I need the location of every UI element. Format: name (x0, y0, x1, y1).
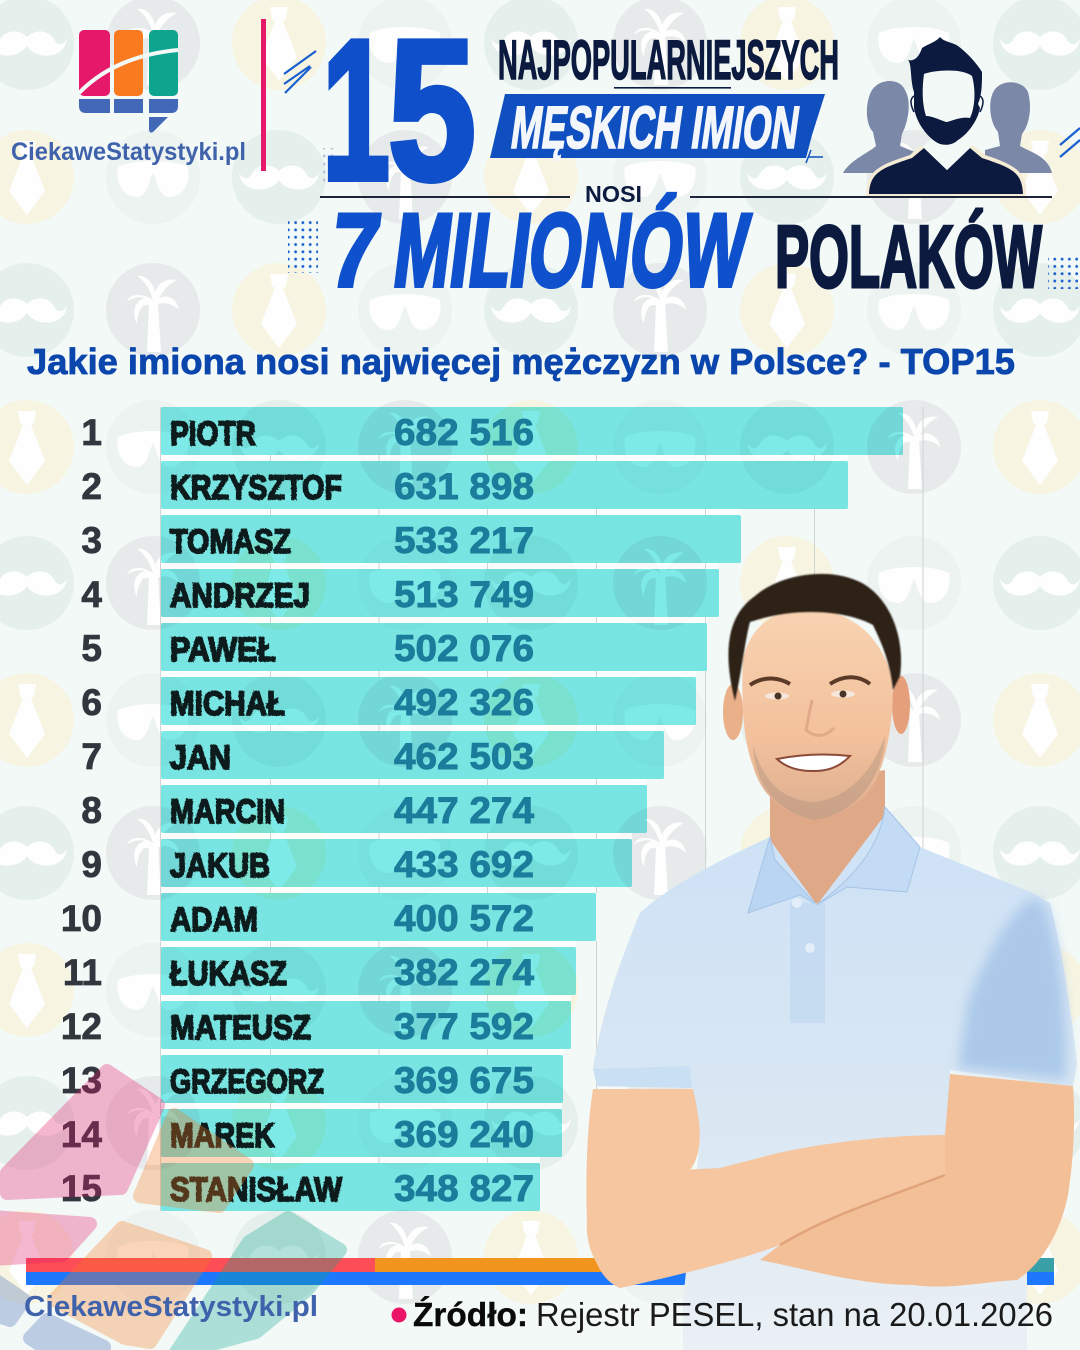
row 11: Łukasz (63, 947, 576, 995)
row 3: Tomasz: 533 217 (394, 520, 534, 561)
row 2: Krzysztof: 631 898 (394, 466, 534, 507)
row 8: Marcin (81, 785, 647, 833)
shirt (593, 807, 1077, 1350)
row 1: Piotr: 682 516 (394, 412, 534, 453)
watermark logo (0, 1071, 340, 1350)
row 4: Andrzej: 4 (81, 574, 102, 615)
row 15: Stanisław: STANISŁAW (170, 1171, 343, 1209)
nose (806, 700, 834, 736)
ears (723, 676, 910, 740)
right sleeve shading (958, 897, 1066, 1080)
row 12: Mateusz: MATEUSZ (170, 1009, 311, 1047)
eyebrows (750, 677, 870, 685)
row 13: Grzegorz: 13 (61, 1060, 102, 1101)
photo: smiling man in blue polo (586, 574, 1077, 1350)
row 3: Tomasz: TOMASZ (170, 523, 291, 561)
headline number 15: 1 (322, 0, 390, 222)
row 12: Mateusz (61, 1001, 571, 1049)
row 9: Jakub: JAKUB (170, 847, 270, 885)
row 3: Tomasz (81, 515, 741, 563)
row 12: Mateusz: 377 592 (394, 1006, 534, 1047)
face (742, 608, 893, 820)
headline banner: męskich imion (490, 93, 825, 163)
chart heading: Jakie imiona nosi najwięcej mężczyzn w Polsce? - TOP15 (27, 341, 1015, 382)
left collar (748, 837, 817, 913)
left sleeve hem (593, 1066, 692, 1088)
row 9: Jakub (81, 839, 632, 887)
row 1: Piotr: PIOTR (170, 415, 256, 453)
row 13: Grzegorz: 369 675 (394, 1060, 534, 1101)
row 11: Łukasz: ŁUKASZ (170, 955, 287, 993)
upper arm and lower forearm right (760, 1074, 1074, 1287)
row 5: Paweł (81, 623, 707, 671)
upper arm left (586, 1089, 700, 1288)
row 10: Adam: 400 572 (394, 898, 534, 939)
row 5: Paweł: PAWEŁ (170, 631, 276, 669)
smile (777, 755, 850, 771)
row 7: Jan: 7 (81, 736, 102, 777)
row 6: Michał (81, 677, 696, 725)
source note: Rejestr PESEL, stan na 20.01.2026 (536, 1296, 1053, 1333)
neck (770, 770, 885, 905)
row 1: Piotr (81, 407, 903, 455)
row 7: Jan: JAN (170, 739, 231, 777)
row 2: Krzysztof (81, 461, 848, 509)
row 1: Piotr: 1 (81, 412, 102, 453)
row 9: Jakub: 433 692 (394, 844, 534, 885)
row 6: Michał: 492 326 (394, 682, 534, 723)
pink vertical divider (261, 19, 266, 171)
headline: 7 milionów: MILIONÓW (388, 192, 755, 309)
row 14: Marek: 14 (61, 1114, 102, 1155)
row 12: Mateusz: 12 (61, 1006, 102, 1047)
row 8: Marcin: MARCIN (170, 793, 285, 831)
row 4: Andrzej: 513 749 (394, 574, 534, 615)
row 2: Krzysztof: KRZYSZTOF (170, 469, 342, 507)
logo: CiekaweStatystyki.pl: CiekaweStatystyki.pl (11, 138, 246, 166)
row 13: Grzegorz (61, 1055, 563, 1103)
row 4: Andrzej (81, 569, 719, 617)
row 10: Adam (61, 893, 596, 941)
footer brand: CiekaweStatystyki.pl (24, 1291, 318, 1323)
headline: 7 milionów (324, 192, 755, 309)
row 2: Krzysztof: 2 (81, 466, 102, 507)
row 8: Marcin: 447 274 (394, 790, 534, 831)
stubble (753, 735, 885, 820)
headline banner: męskich imion: MĘSKICH IMION (507, 93, 804, 161)
row 6: Michał: MICHAŁ (170, 685, 285, 723)
headline number 15: 5 (388, 0, 476, 222)
row 14: Marek: MAREK (170, 1117, 275, 1155)
row 15: Stanisław: 348 827 (394, 1168, 534, 1209)
row 7: Jan: 462 503 (394, 736, 534, 777)
upper forearm (587, 1135, 945, 1288)
row 11: Łukasz: 382 274 (394, 952, 534, 993)
row 10: Adam: 10 (61, 898, 102, 939)
icon: group of men silhouettes (843, 37, 1052, 196)
row 14: Marek (61, 1109, 562, 1157)
halftone dots (288, 148, 1078, 289)
row 10: Adam: ADAM (170, 901, 258, 939)
hair (728, 574, 901, 701)
row 13: Grzegorz: GRZEGORZ (170, 1063, 324, 1101)
row 14: Marek: 369 240 (394, 1114, 534, 1155)
footer colour bars (26, 1258, 1054, 1285)
row 9: Jakub: 9 (81, 844, 102, 885)
row 5: Paweł: 5 (81, 628, 102, 669)
row 8: Marcin: 8 (81, 790, 102, 831)
arm crease (780, 1175, 945, 1245)
placket and buttons (790, 898, 825, 1023)
decorative slashes (284, 51, 1080, 157)
row 11: Łukasz: 11 (63, 952, 102, 993)
source note: Źródło: (413, 1296, 528, 1333)
row 6: Michał: 6 (81, 682, 102, 723)
bar chart (61, 407, 923, 1211)
right collar (817, 807, 920, 905)
row 7: Jan (81, 731, 664, 779)
separator with word NOSI: NOSI (585, 181, 642, 207)
eyes (765, 690, 855, 700)
row 4: Andrzej: ANDRZEJ (170, 577, 310, 615)
row 15: Stanisław (61, 1163, 540, 1211)
row 15: Stanisław: 15 (61, 1168, 102, 1209)
row 3: Tomasz: 3 (81, 520, 102, 561)
row 5: Paweł: 502 076 (394, 628, 534, 669)
logo: CiekaweStatystyki.pl (11, 30, 246, 166)
headline: 7 milionów: 7 (324, 192, 386, 309)
